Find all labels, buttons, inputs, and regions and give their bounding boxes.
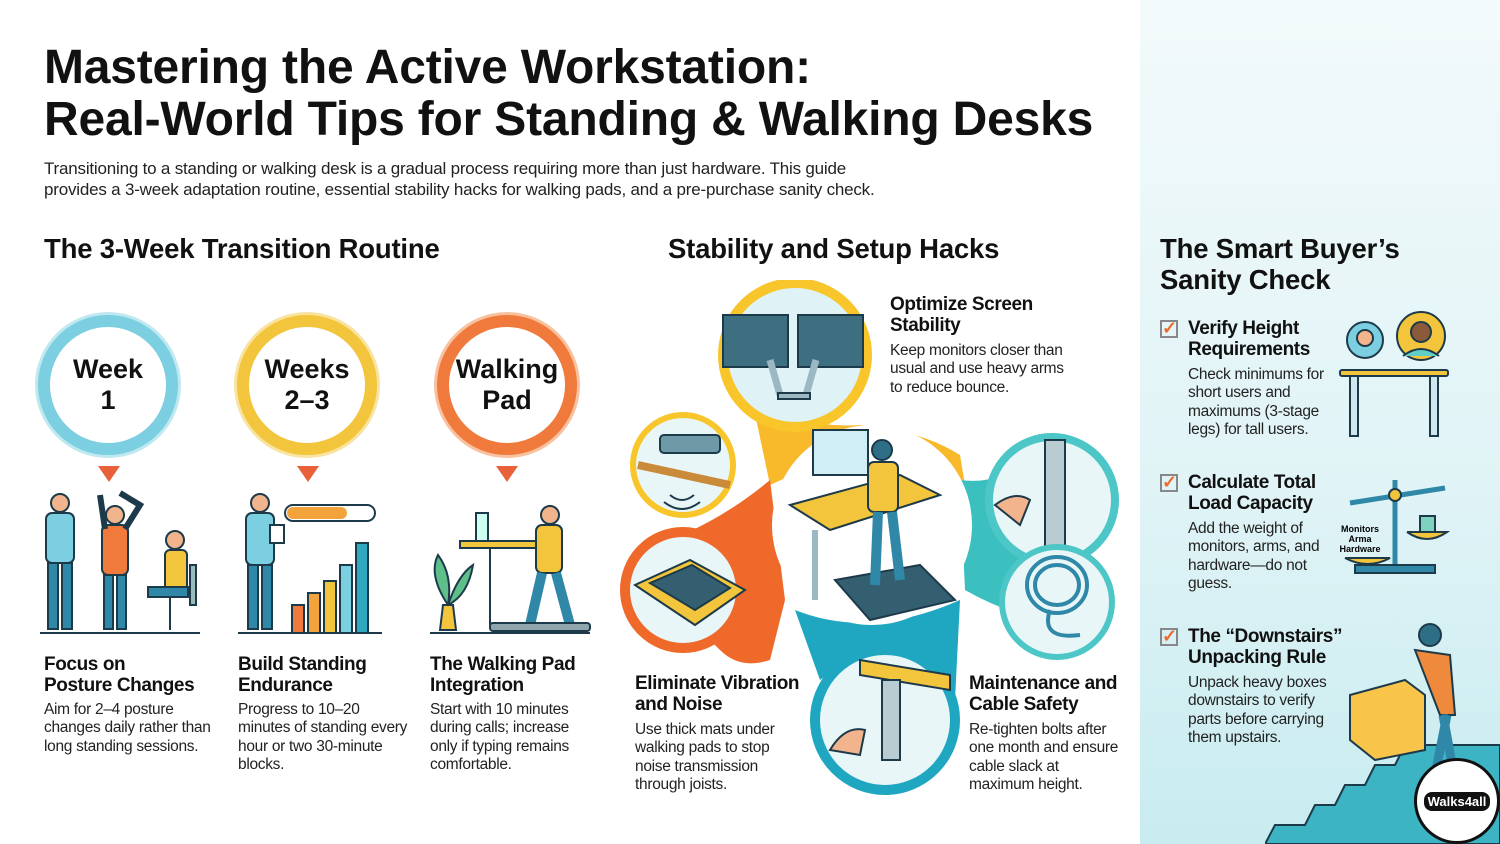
caption: weeks 2-3: Build Standing xyxy=(238,654,366,675)
caption: weeks 2-3: Endurance xyxy=(238,675,333,696)
check item: load: hardware—do not xyxy=(1188,557,1307,574)
check item: height: Requirements xyxy=(1188,339,1310,360)
text: vibration: Use thick mats under xyxy=(635,721,775,738)
check item: downstairs: parts before carrying xyxy=(1188,711,1324,728)
caption: walking pad: Integration xyxy=(430,675,524,696)
right panel background xyxy=(1140,0,1500,844)
check item: load: Calculate Total xyxy=(1188,472,1316,493)
check item: load: Add the weight of xyxy=(1188,520,1303,537)
text: vibration: and Noise xyxy=(635,694,722,715)
caption: weeks 2-3: hour or two 30-minute xyxy=(238,738,382,755)
check item: downstairs xyxy=(1160,626,1342,746)
caption: walking pad xyxy=(430,654,575,773)
stability cluster xyxy=(620,280,1119,795)
caption: weeks 2-3: minutes of standing every xyxy=(238,719,407,736)
check item: height: maximums (3-stage xyxy=(1188,403,1319,420)
circle: weeks 2-3: 2–3 xyxy=(284,385,330,415)
caption: week 1: Posture Changes xyxy=(44,675,194,696)
circle: weeks 2-3: Weeks xyxy=(264,354,350,384)
caption: walking pad: during calls; increase xyxy=(430,719,569,736)
icon: stairs and box xyxy=(1265,623,1500,844)
caption: week 1: Aim for 2–4 posture xyxy=(44,701,174,718)
circle: walking pad: Pad xyxy=(482,385,532,415)
text: vibration: walking pads to stop xyxy=(635,739,769,756)
subtitle: provides a 3-week adaptation routine, essential stability hacks for walking pads, and a pre-purchase sanity check. xyxy=(44,180,875,199)
text: optimize screen: usual and use heavy arms xyxy=(890,360,1064,377)
heading: buyer: The Smart Buyer’s Sanity Check xyxy=(1160,233,1400,295)
subtitle: Transitioning to a standing or walking desk is a gradual process requiring more than just hardware. This guide xyxy=(44,159,846,178)
text: optimize screen: Optimize Screen xyxy=(890,294,1033,315)
caption: weeks 2-3: Progress to 10–20 xyxy=(238,701,360,718)
text: maintenance xyxy=(969,673,1118,793)
check item: downstairs: them upstairs. xyxy=(1188,729,1281,746)
check item: height: short users and xyxy=(1188,384,1290,401)
subtitle xyxy=(44,159,875,199)
check item: load: Load Capacity xyxy=(1188,493,1313,514)
caption: walking pad: comfortable. xyxy=(430,756,512,773)
check item: downstairs: Unpack heavy boxes xyxy=(1188,674,1326,691)
caption: weeks 2-3: blocks. xyxy=(238,756,284,773)
circle: week 1: Week xyxy=(73,354,143,384)
check item: height: ✓ xyxy=(1162,318,1177,338)
text: optimize screen: Stability xyxy=(890,315,960,336)
heading: transition routine: The 3-Week Transition Routine xyxy=(44,233,440,264)
text: maintenance: Cable Safety xyxy=(969,694,1078,715)
text: maintenance: Maintenance and xyxy=(969,673,1117,694)
title: Mastering the Active Workstation: xyxy=(44,41,811,94)
check item: downstairs: ✓ xyxy=(1162,626,1177,646)
check item: load: ✓ xyxy=(1162,472,1177,492)
check item: height: legs) for tall users. xyxy=(1188,421,1308,438)
caption: walking pad: Start with 10 minutes xyxy=(430,701,568,718)
icon: scale: Monitors xyxy=(1341,524,1379,534)
text: optimize screen: to reduce bounce. xyxy=(890,379,1009,396)
check item: downstairs: The “Downstairs” xyxy=(1188,626,1342,647)
text: maintenance: one month and ensure xyxy=(969,739,1118,756)
arrow 2 xyxy=(297,466,319,482)
circle: walking pad: Walking xyxy=(456,354,558,384)
text: vibration: noise transmission xyxy=(635,758,758,775)
icon: height desk xyxy=(1339,311,1449,437)
check item: load: monitors, arms, and xyxy=(1188,538,1319,555)
check item: height: Check minimums for xyxy=(1188,366,1324,383)
text: maintenance: Re-tighten bolts after xyxy=(969,721,1106,738)
logo: Walks4all xyxy=(1428,794,1486,808)
caption: week 1: long standing sessions. xyxy=(44,738,198,755)
logo xyxy=(1414,758,1500,844)
icon: scale xyxy=(1339,480,1450,574)
check item: downstairs: downstairs to verify xyxy=(1188,692,1315,709)
caption: weeks 2-3 xyxy=(238,654,408,773)
text: optimize screen xyxy=(890,294,1064,396)
caption: week 1 xyxy=(44,654,211,755)
heading: stability: Stability and Setup Hacks xyxy=(668,233,999,264)
text: vibration xyxy=(635,673,799,793)
check item: height xyxy=(1160,318,1324,438)
text: vibration: through joists. xyxy=(635,776,727,793)
check item: downstairs: Unpacking Rule xyxy=(1188,647,1326,668)
check item: load xyxy=(1160,472,1319,592)
caption: week 1: changes daily rather than xyxy=(44,719,211,736)
caption: walking pad: only if typing remains xyxy=(430,738,569,755)
text: vibration: Eliminate Vibration xyxy=(635,673,799,694)
check item: load: guess. xyxy=(1188,575,1232,592)
text: optimize screen: Keep monitors closer than xyxy=(890,342,1063,359)
circle: week 1: 1 xyxy=(100,385,116,415)
icon: scale: Arma xyxy=(1348,534,1372,544)
text: maintenance: cable slack at xyxy=(969,758,1059,775)
arrow 3 xyxy=(496,466,518,482)
circle: week 1 xyxy=(38,315,178,455)
circle: walking pad xyxy=(437,315,577,455)
caption: week 1: Focus on xyxy=(44,654,125,675)
title: Real-World Tips for Standing & Walking Desks xyxy=(44,93,1093,146)
icon: scale: Hardware xyxy=(1339,544,1381,554)
arrow 1 xyxy=(98,466,120,482)
text: maintenance: maximum height. xyxy=(969,776,1083,793)
circle: weeks 2-3 xyxy=(237,315,377,455)
check item: height: Verify Height xyxy=(1188,318,1299,339)
caption: walking pad: The Walking Pad xyxy=(430,654,575,675)
title xyxy=(44,41,1093,146)
illustrations: week stages xyxy=(40,490,591,634)
